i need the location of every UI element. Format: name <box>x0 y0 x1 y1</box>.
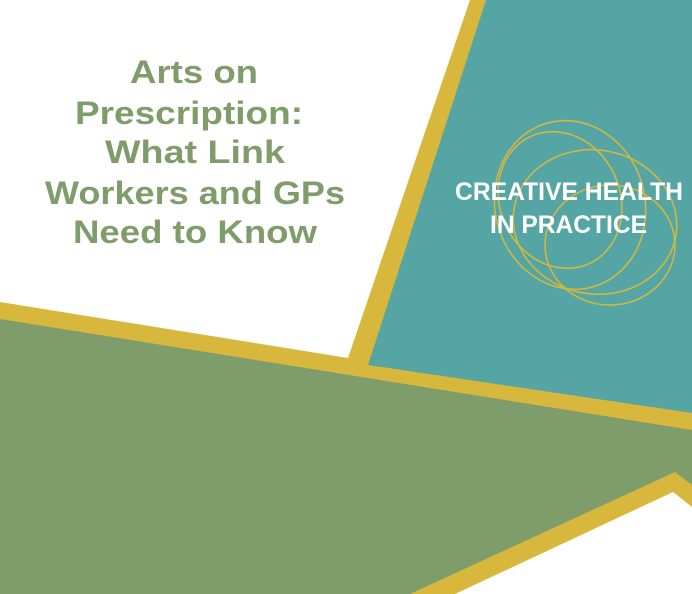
title: Need to Know <box>73 214 317 250</box>
title: Workers and GPs <box>45 175 345 211</box>
heading: Creative Health in Practice: CREATIVE HEALTH <box>455 178 683 206</box>
title: Prescription: <box>75 95 303 131</box>
heading: Creative Health in Practice: IN PRACTICE <box>490 211 647 239</box>
panel: bottom-right white triangle <box>455 492 692 594</box>
title: What Link <box>105 134 285 170</box>
heading: Creative Health in Practice <box>455 178 683 239</box>
panel: teal block <box>368 0 692 413</box>
panel: green block <box>0 319 692 594</box>
icon: scribbled circles <box>476 103 688 307</box>
title: Arts on <box>130 54 258 90</box>
title <box>45 54 345 250</box>
